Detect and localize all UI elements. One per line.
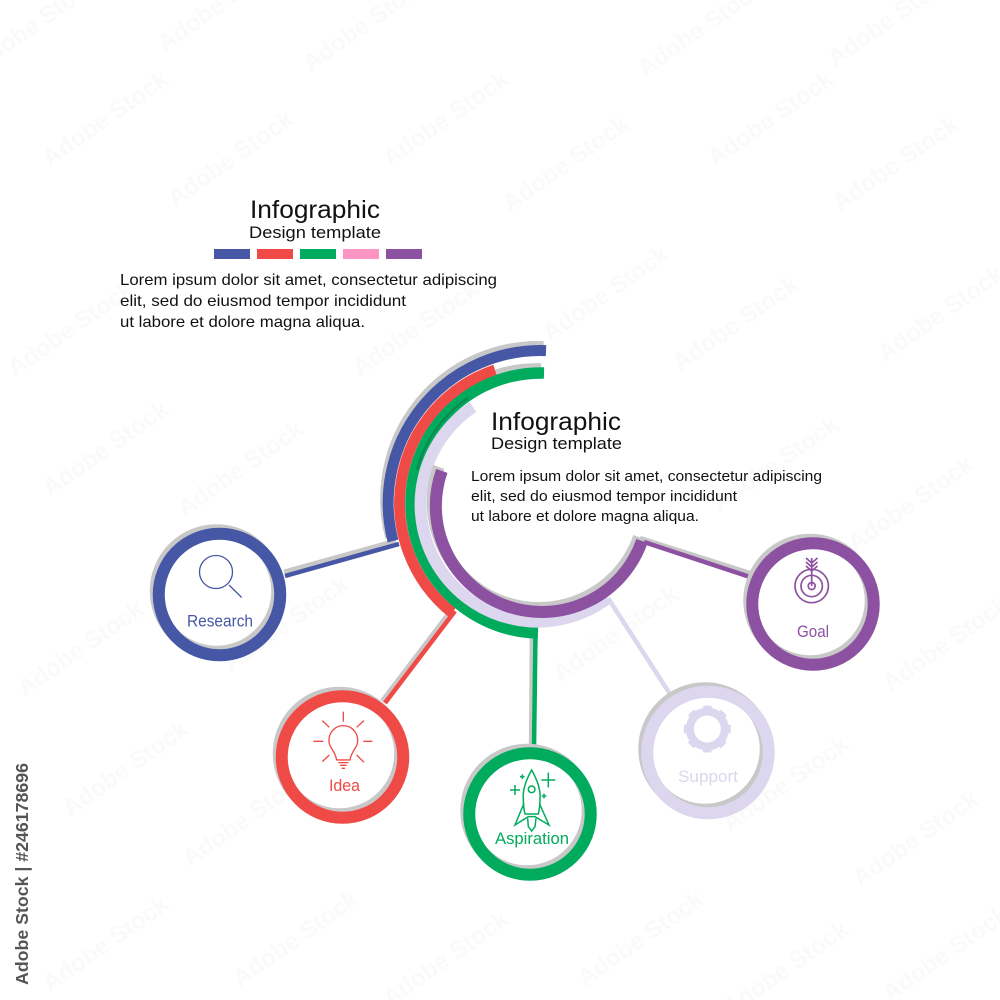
top heading block bbox=[249, 196, 381, 242]
watermark pattern: Adobe Stock bbox=[668, 270, 804, 377]
label: Idea: Idea bbox=[329, 776, 361, 795]
centre body text: Lorem ipsum dolor sit amet, consectetur adipiscing bbox=[471, 468, 822, 485]
watermark pattern: Adobe Stock bbox=[718, 730, 854, 837]
colour key bars bbox=[214, 249, 422, 259]
icon: target with arrow bbox=[795, 558, 828, 603]
watermark pattern: Adobe Stock bbox=[38, 395, 174, 502]
central concentric arcs bbox=[284, 347, 750, 750]
watermark pattern: Adobe Stock bbox=[498, 110, 634, 217]
stock credit vertical: Adobe Stock | #246178696 bbox=[12, 763, 32, 985]
label: Aspiration: Aspiration bbox=[495, 830, 569, 848]
node: Idea bbox=[279, 693, 403, 818]
subtitle: Design template: Design template bbox=[249, 223, 381, 242]
icon: light bulb bbox=[313, 712, 372, 768]
watermark pattern: Adobe Stock bbox=[548, 580, 684, 687]
centre body text bbox=[471, 468, 822, 525]
arc: blue bbox=[284, 347, 546, 576]
watermark pattern: Adobe Stock bbox=[218, 570, 354, 677]
watermark pattern: Adobe Stock bbox=[13, 595, 149, 702]
icon: gear bbox=[686, 708, 728, 750]
watermark pattern: Adobe Stock bbox=[3, 275, 139, 382]
icon: magnifier bbox=[200, 556, 242, 598]
top body text bbox=[120, 272, 497, 331]
watermark pattern: Adobe Stock bbox=[843, 450, 979, 557]
watermark pattern: Adobe Stock bbox=[173, 415, 309, 522]
arc: purple bbox=[433, 467, 750, 612]
watermark pattern: Adobe Stock bbox=[58, 715, 194, 822]
arc shadow on green bbox=[417, 398, 468, 470]
label: Goal: Goal bbox=[797, 622, 829, 641]
arc: lavender bbox=[421, 407, 670, 694]
centre body text: elit, sed do eiusmod tempor incididunt bbox=[471, 488, 738, 505]
node: Support bbox=[644, 688, 769, 813]
arc: green bbox=[411, 373, 544, 750]
icon: rocket bbox=[510, 770, 555, 831]
centre body text: ut labore et dolore magna aliqua. bbox=[471, 508, 699, 525]
node: Research bbox=[156, 530, 280, 655]
centre heading block bbox=[491, 408, 622, 453]
label: Research: Research bbox=[187, 612, 253, 630]
top body text: ut labore et dolore magna aliqua. bbox=[120, 314, 365, 331]
centre subtitle: Design template bbox=[491, 434, 622, 453]
watermark pattern: Adobe Stock bbox=[178, 765, 314, 872]
node: Goal bbox=[749, 540, 874, 665]
label: Support: Support bbox=[678, 767, 738, 786]
watermark pattern: Adobe Stock bbox=[348, 275, 484, 382]
watermark pattern: Adobe Stock bbox=[703, 65, 839, 172]
watermark pattern: Adobe Stock bbox=[828, 110, 964, 217]
arc shadow: green bbox=[467, 369, 541, 389]
watermark pattern: Adobe Stock bbox=[573, 885, 709, 992]
title: Infographic: Infographic bbox=[250, 196, 380, 224]
top body text: elit, sed do eiusmod tempor incididunt bbox=[120, 293, 407, 310]
node: Aspiration bbox=[466, 750, 591, 875]
watermark pattern: Adobe Stock bbox=[38, 65, 174, 172]
watermark pattern: Adobe Stock bbox=[163, 105, 299, 212]
centre title: Infographic bbox=[491, 408, 621, 436]
top body text: Lorem ipsum dolor sit amet, consectetur adipiscing bbox=[120, 272, 497, 289]
watermark pattern: Adobe Stock bbox=[538, 240, 674, 347]
arc: red bbox=[382, 370, 495, 703]
watermark pattern: Adobe Stock bbox=[708, 410, 844, 517]
watermark pattern: Adobe Stock bbox=[228, 885, 364, 992]
watermark pattern: Adobe Stock bbox=[38, 890, 174, 997]
watermark pattern: Adobe Stock bbox=[848, 785, 984, 892]
watermark pattern: Adobe Stock bbox=[378, 65, 514, 172]
